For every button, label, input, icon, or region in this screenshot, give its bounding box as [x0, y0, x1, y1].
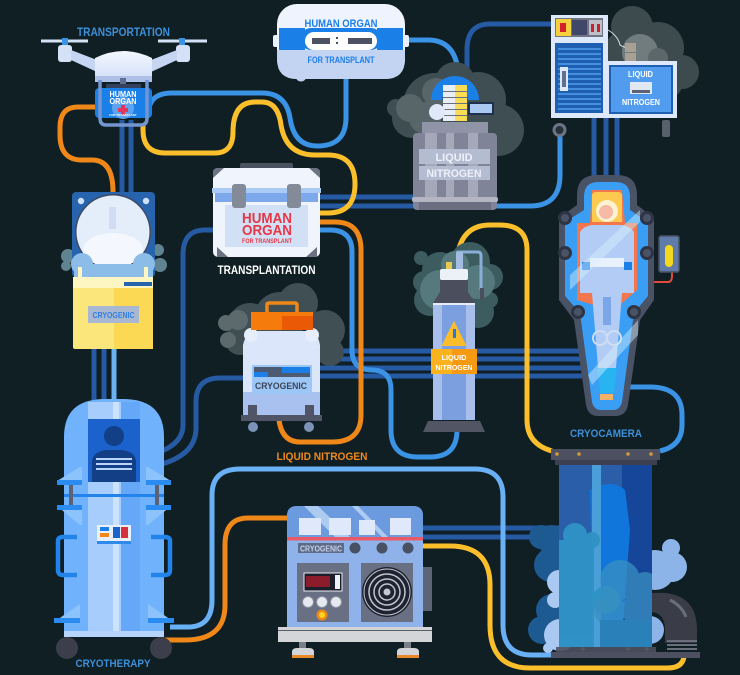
- drone package text line 2: ORGAN: [110, 97, 137, 106]
- unit side connector: [662, 120, 670, 137]
- icon: cryotherapy chamber: [54, 399, 174, 659]
- case caption: FOR TRANSPLANT: [242, 238, 292, 245]
- icon: nitrogen cylinder: [413, 242, 503, 432]
- heading: liquid nitrogen: LIQUID NITROGEN: [276, 451, 368, 463]
- icon: cryogenic container: [218, 283, 345, 432]
- cylinder label line 2: NITROGEN: [436, 363, 472, 372]
- drone package text: HUMAN: [110, 90, 137, 99]
- case title line 2: ORGAN: [242, 222, 292, 239]
- icon: transportation drone: [41, 38, 207, 125]
- heading: cryotherapy: CRYOTHERAPY: [76, 658, 151, 670]
- drone red cross: [118, 105, 128, 115]
- unit label line 1: LIQUID: [628, 70, 653, 79]
- oxygen side box: [654, 236, 679, 282]
- unit connectors: [554, 124, 565, 136]
- icon: human organ cooler: [273, 4, 409, 82]
- container label: CRYOGENIC: [255, 381, 307, 392]
- cooler title: HUMAN ORGAN: [304, 18, 378, 30]
- tank label line 1: LIQUID: [436, 152, 473, 164]
- icon: transplantation case: [212, 163, 321, 257]
- case title line 1: HUMAN: [242, 210, 292, 227]
- icon: liquid nitrogen tank with cloud: [387, 62, 524, 210]
- cooler caption: FOR TRANSPLANT: [308, 55, 375, 65]
- machine label: CRYOGENIC: [300, 544, 342, 554]
- heading: transportation: TRANSPORTATION: [77, 27, 170, 39]
- icon: cryocamera capsule: [559, 175, 679, 416]
- icon: cryogenic machine: [278, 506, 432, 658]
- tank label line 2: NITROGEN: [426, 168, 482, 180]
- icon: cryo tank: [528, 449, 700, 658]
- drone package caption: FOR TRANSPLANT: [109, 113, 137, 117]
- icon: liquid nitrogen control unit: [551, 6, 699, 136]
- cylinder label line 1: LIQUID: [442, 353, 467, 362]
- icon: cryogenic yellow unit: [61, 192, 167, 349]
- unit label line 2: NITROGEN: [622, 98, 660, 107]
- heading: cryocamera: CRYOCAMERA: [570, 428, 642, 440]
- yellow unit label: CRYOGENIC: [92, 310, 134, 320]
- heading: transplantation: TRANSPLANTATION: [218, 265, 316, 277]
